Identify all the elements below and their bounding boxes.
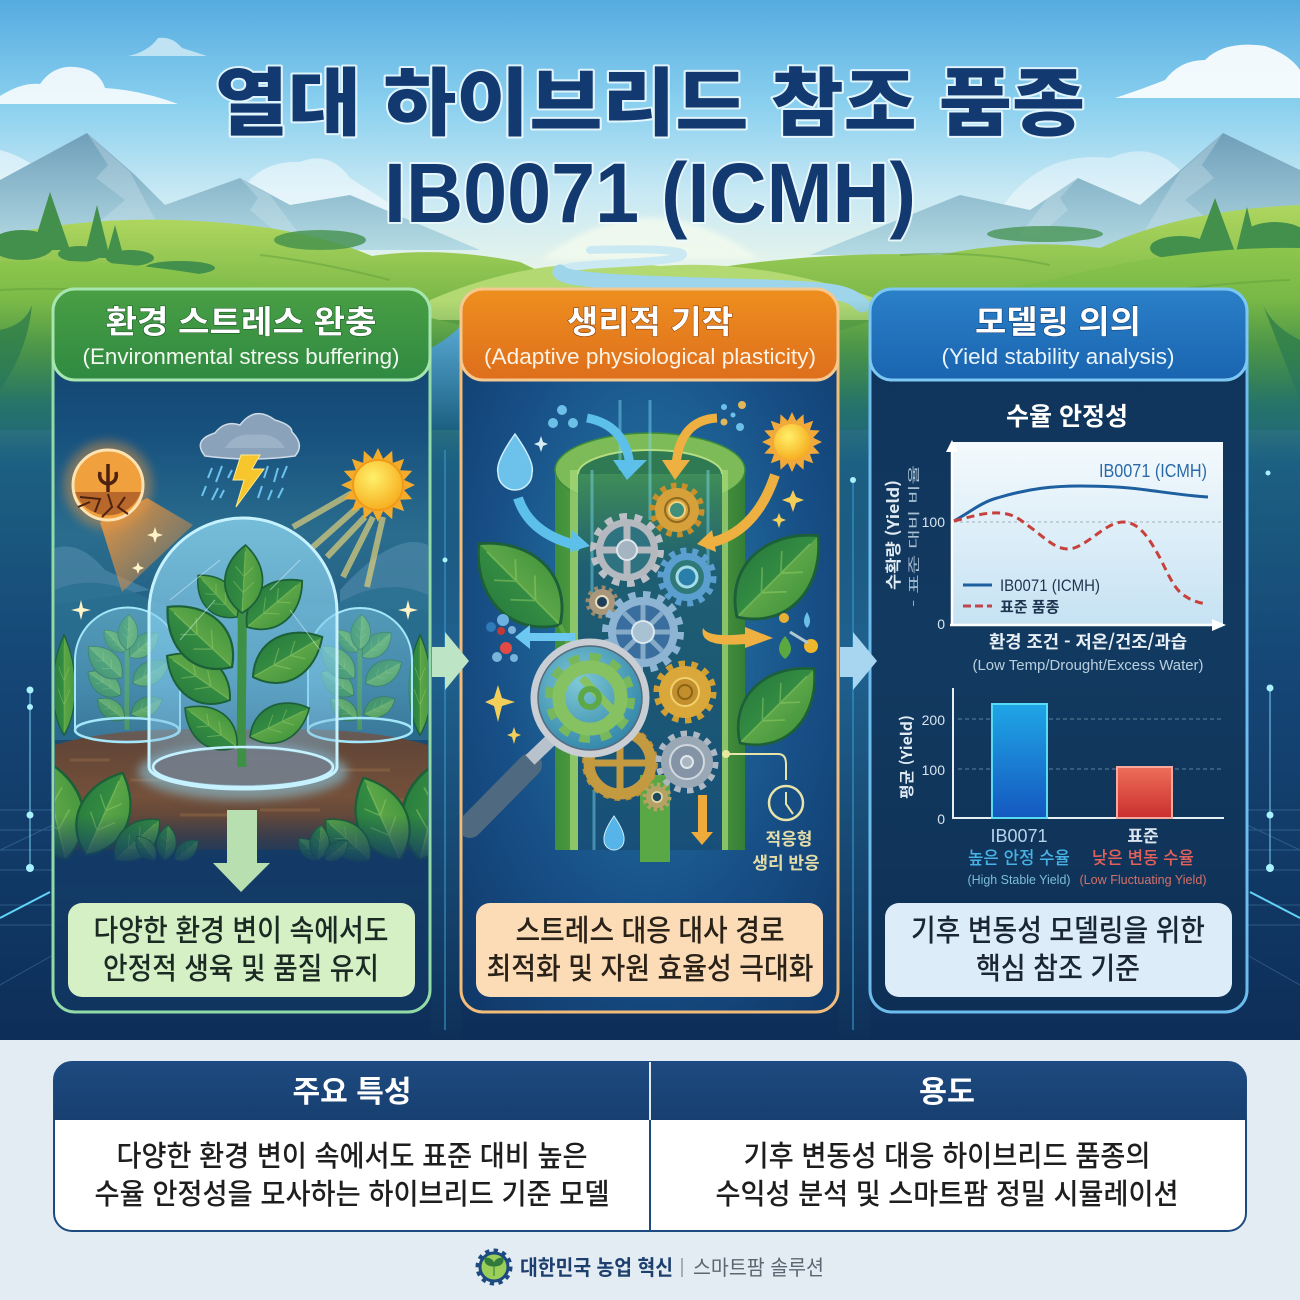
line chart: 0: [937, 616, 945, 632]
column: uses: [716, 1067, 1178, 1213]
chart axis label: 환경 조건 - 저온/건조/과습: [989, 629, 1187, 654]
footer: 스마트팜 솔루션: [693, 1252, 824, 1282]
gears: [585, 486, 715, 809]
callout: orange: 스트레스 대응 대사 경로: [516, 906, 784, 950]
panel: adaptive physiological plasticity: [456, 289, 841, 1012]
line chart: - 표준 대비 비율: [905, 465, 922, 607]
icon: drought circle: [64, 441, 152, 529]
bar chart: 표준: [1127, 822, 1159, 847]
bar chart: 0: [937, 811, 945, 827]
line chart: IB0071 (ICMH): [1000, 577, 1100, 595]
line chart: [880, 440, 1226, 632]
title: 열대 하이브리드 참조 품종: [215, 44, 1085, 151]
column: key characteristics: 주요 특성: [292, 1067, 412, 1111]
icon: magnifying glass: [470, 642, 646, 826]
callout line with clock: 적응형: [766, 825, 812, 850]
callout line with clock: [722, 750, 820, 874]
stem tube: [555, 400, 745, 862]
callout: green: 안정적 생육 및 품질 유지: [103, 944, 379, 988]
panel header: blue: [870, 289, 1247, 380]
column: key characteristics: [94, 1067, 610, 1213]
chart axis label: [972, 629, 1204, 674]
bar chart: 평균 (Yield): [896, 715, 917, 799]
sparkles: [71, 527, 418, 620]
icon: main plant under dome: [138, 518, 348, 800]
callout: green: 다양한 환경 변이 속에서도: [94, 906, 388, 950]
bottom band: [0, 1040, 1300, 1300]
callout: orange: [476, 903, 823, 997]
column: key characteristics: 수율 안정성을 모사하는 하이브리드 기준 모델: [94, 1171, 610, 1213]
bar chart: [896, 688, 1224, 887]
panel header: orange: (Adaptive physiological plasticity): [484, 344, 816, 369]
callout: orange: 최적화 및 자원 효율성 극대화: [486, 944, 814, 988]
arrow: panel 2 to 3: [840, 632, 877, 690]
line chart: 표준 품종: [1000, 596, 1060, 617]
panel: yield stability analysis: [870, 289, 1247, 1012]
panel header: blue: (Yield stability analysis): [942, 344, 1174, 369]
background landscape: [0, 0, 1300, 1040]
callout line with clock: 생리 반응: [752, 849, 820, 874]
callout: green: [68, 903, 415, 997]
line chart: IB0071 (ICMH): [1099, 461, 1207, 481]
bar chart: (High Stable Yield): [968, 872, 1070, 887]
icon: gear logo: [478, 1251, 510, 1283]
chart axis label: (Low Temp/Drought/Excess Water): [972, 657, 1204, 674]
column: uses: 수익성 분석 및 스마트팜 정밀 시뮬레이션: [716, 1171, 1178, 1213]
icon: sparkles: [485, 436, 804, 744]
panel header: green: [53, 289, 430, 380]
bar chart: 낮은 변동 수율: [1092, 845, 1194, 870]
icon: sun: [341, 448, 415, 522]
panel 2 illustration: [456, 400, 841, 874]
panel 1 illustration: [55, 490, 428, 860]
title: IB0071 (ICMH): [384, 146, 916, 240]
bar chart: 200: [922, 712, 945, 728]
river: [560, 249, 862, 305]
column: key characteristics: 다양한 환경 변이 속에서도 표준 대비 높은: [116, 1133, 588, 1175]
panel: environmental stress buffering: [52, 288, 432, 1014]
icon: water drops: [498, 434, 624, 850]
callout: blue: [885, 903, 1232, 997]
line chart: 수확량 (Yield): [880, 480, 904, 590]
table: characteristics and uses: [54, 1062, 1246, 1231]
panel header: green: (Environmental stress buffering): [82, 344, 399, 369]
panel header: orange: 생리적 기작: [567, 297, 733, 343]
icon: small shield domes: [75, 608, 412, 742]
arrows and molecules: [486, 401, 818, 845]
column: uses: 용도: [919, 1067, 975, 1111]
panel header: orange: [461, 289, 838, 380]
arrow: down: [213, 810, 270, 892]
panel header: green: 환경 스트레스 완충: [106, 297, 376, 343]
footer: 대한민국 농업 혁신: [520, 1252, 673, 1282]
icon: foreground leaves: [55, 765, 428, 860]
footer: [478, 1251, 824, 1283]
heading: yield stability: 수율 안정성: [1006, 397, 1128, 433]
icon: sun: [762, 412, 822, 472]
callout: blue: 핵심 참조 기준: [976, 944, 1140, 988]
panel header: blue: 모델링 의의: [975, 297, 1141, 343]
line chart: 100: [922, 514, 945, 530]
callout: blue: 기후 변동성 모델링을 위한: [911, 906, 1205, 950]
bar chart: 높은 안정 수율: [968, 845, 1070, 870]
arrow: panel 1 to 2: [432, 632, 469, 690]
bar chart: IB0071: [990, 826, 1048, 846]
bar chart: 100: [922, 762, 945, 778]
leaves: [476, 534, 820, 746]
column: uses: 기후 변동성 대응 하이브리드 품종의: [744, 1133, 1150, 1175]
icon: storm cloud: [200, 414, 299, 507]
title: [215, 44, 1085, 240]
bar chart: (Low Fluctuating Yield): [1080, 872, 1206, 887]
